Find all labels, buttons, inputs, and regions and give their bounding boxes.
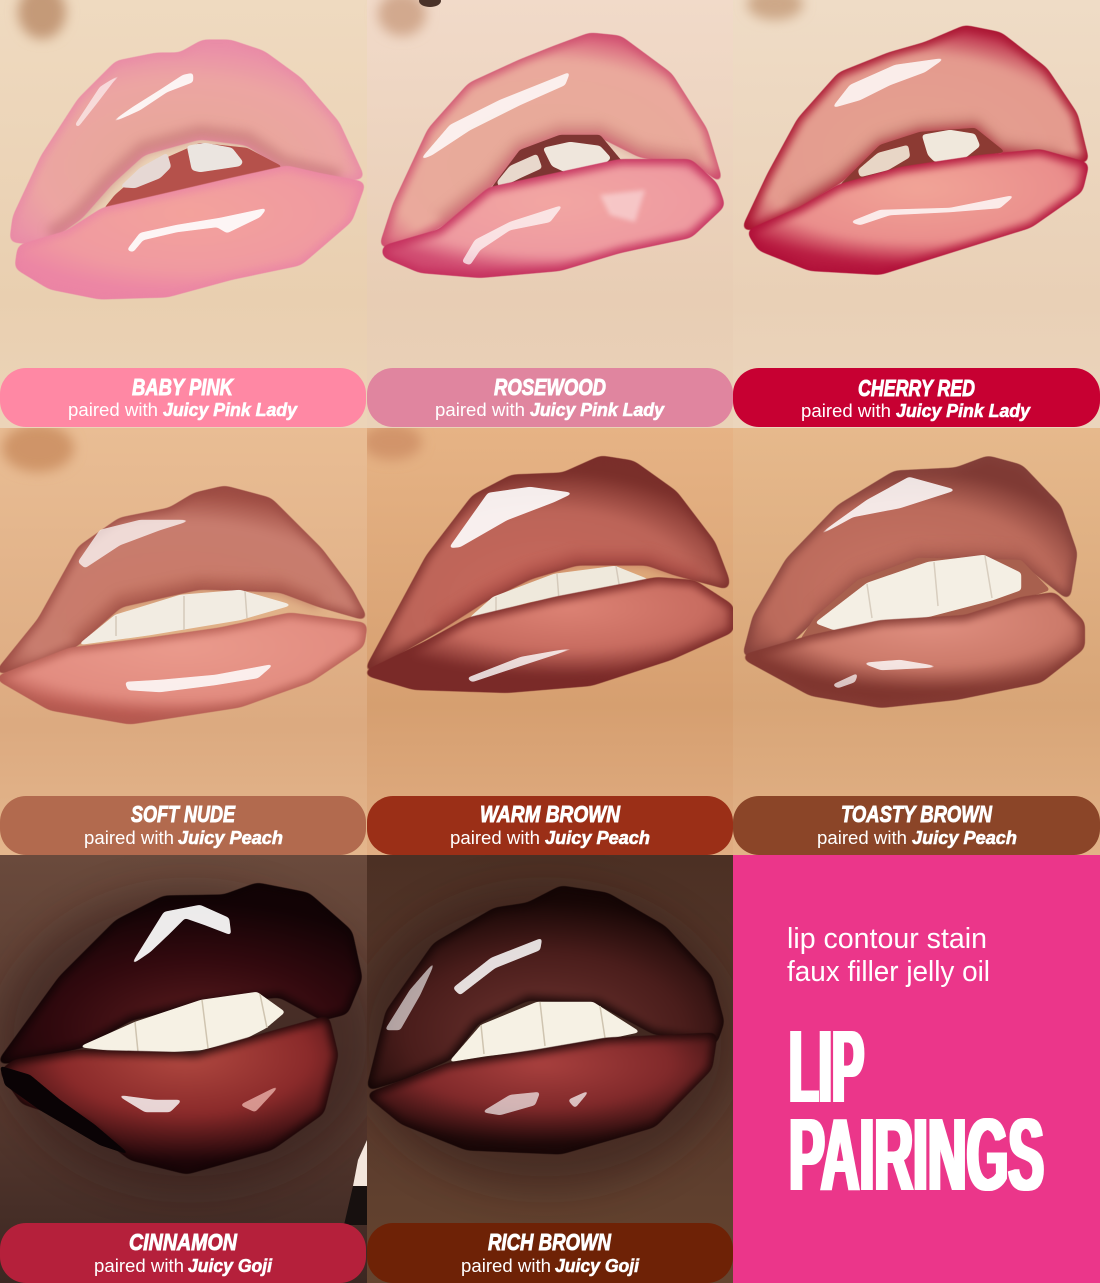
panel: soft nude	[0, 424, 367, 856]
lips: rosewood	[382, 35, 722, 275]
label: warm brown: WARM BROWN	[480, 801, 620, 827]
label: rich brown: Juicy Goji	[555, 1256, 640, 1276]
label: toasty brown: paired with	[817, 828, 907, 848]
label: cinnamon	[0, 1223, 366, 1283]
text: product names	[787, 923, 990, 988]
label: rich brown: paired with	[461, 1256, 551, 1276]
label: rosewood	[367, 368, 733, 427]
skin shadow	[355, 890, 735, 1190]
icon: nose shadow	[378, 0, 426, 36]
label: warm brown	[367, 796, 733, 855]
label: rosewood: ROSEWOOD	[494, 374, 606, 400]
text: product names: lip contour stain	[787, 923, 987, 955]
icon: nose shadow	[18, 0, 66, 39]
panel: toasty brown	[733, 428, 1100, 856]
label: cinnamon: paired with	[94, 1256, 184, 1276]
lips: baby pink	[12, 42, 363, 297]
panel: cherry red	[733, 0, 1100, 428]
heading: lip pairings: LIP	[789, 1009, 864, 1124]
label: rosewood: paired with	[435, 400, 525, 420]
label: rosewood: Juicy Pink Lady	[530, 400, 665, 420]
label: cinnamon: CINNAMON	[129, 1229, 237, 1255]
skin shadow	[0, 890, 380, 1190]
icon: nose shadow	[2, 424, 74, 472]
panel: title block	[733, 855, 1100, 1283]
lips: warm brown	[367, 458, 731, 690]
label: toasty brown: TOASTY BROWN	[841, 801, 992, 827]
lips: cinnamon	[0, 885, 360, 1172]
icon: nostril	[419, 0, 441, 7]
panel: rich brown	[355, 855, 735, 1283]
icon: neck shadow	[344, 1186, 367, 1225]
label: soft nude: Juicy Peach	[178, 828, 283, 848]
lips: toasty brown	[745, 458, 1082, 705]
label: cinnamon: Juicy Goji	[188, 1256, 273, 1276]
panel: warm brown	[362, 424, 733, 856]
label: cherry red: Juicy Pink Lady	[896, 401, 1031, 421]
label: baby pink	[0, 368, 366, 427]
label: baby pink: Juicy Pink Lady	[163, 400, 298, 420]
label: warm brown: Juicy Peach	[545, 828, 650, 848]
lips: rich brown	[369, 888, 722, 1152]
label: soft nude: paired with	[84, 828, 174, 848]
label: soft nude: SOFT NUDE	[131, 801, 236, 827]
label: baby pink: paired with	[68, 400, 158, 420]
lips: cherry red	[745, 28, 1086, 272]
label: rich brown: RICH BROWN	[488, 1229, 611, 1255]
label: warm brown: paired with	[450, 828, 540, 848]
label: cherry red: CHERRY RED	[858, 375, 975, 401]
label: toasty brown: Juicy Peach	[912, 828, 1017, 848]
heading: lip pairings	[789, 1009, 1044, 1212]
lips: soft nude	[0, 488, 365, 722]
label: cherry red: paired with	[801, 401, 891, 421]
label: toasty brown	[733, 796, 1100, 855]
panel: cinnamon	[0, 855, 380, 1283]
label: cherry red	[733, 368, 1100, 427]
icon: neck edge	[353, 1140, 367, 1186]
icon: nose shadow	[747, 0, 803, 20]
panel: baby pink	[0, 0, 367, 428]
icon: nose shadow	[362, 424, 422, 460]
label: baby pink: BABY PINK	[132, 374, 234, 400]
label: rich brown	[367, 1223, 733, 1283]
label: soft nude	[0, 796, 366, 855]
panel: rosewood	[367, 0, 733, 428]
text: product names: faux filler jelly oil	[787, 956, 990, 988]
